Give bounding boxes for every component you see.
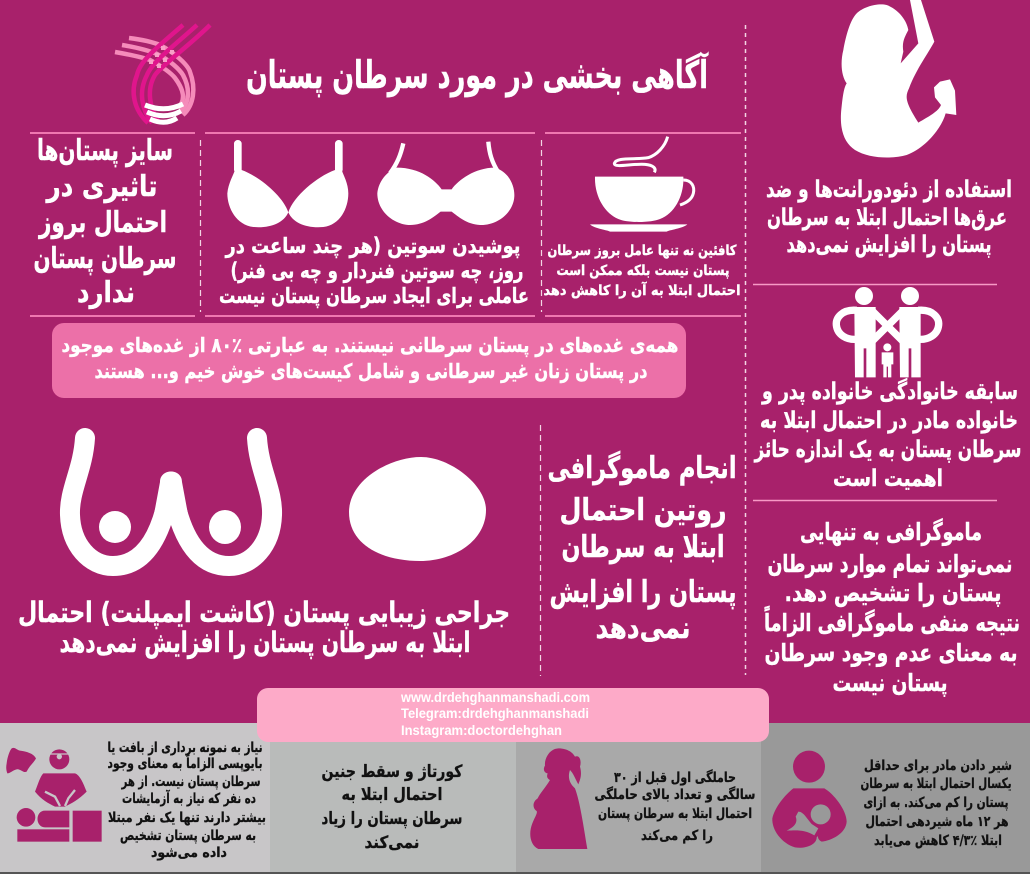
panel: implant surgery text: ابتلا به سرطان پستان را افزایش نمی‌دهد bbox=[60, 626, 470, 659]
icon: underwire bra bbox=[227, 140, 348, 227]
panel: bra text: پوشیدن سوتین (هر چند ساعت در bbox=[225, 234, 520, 258]
panel: routine mammography text: ابتلا به سرطان bbox=[562, 530, 724, 565]
icon: coffee cup bbox=[590, 137, 694, 232]
panel: routine mammography text bbox=[548, 450, 736, 646]
panel: breastfeeding text bbox=[860, 758, 1012, 849]
website and social box: www.drdehghanmanshadi.com bbox=[400, 690, 590, 705]
website and social box bbox=[257, 688, 769, 742]
panel: biopsy text: نیاز به نمونه برداری از بافت یا bbox=[108, 740, 262, 756]
panel: breastfeeding text: هر ۱۲ ماه شیردهی احتمال bbox=[866, 814, 1008, 830]
panel: curettage text: نمی‌کند bbox=[364, 833, 420, 853]
panel: biopsy text: به سرطان پستان تشخیص bbox=[120, 828, 256, 844]
website and social box: Telegram:drdehghanmanshadi bbox=[401, 706, 589, 721]
panel: bra text bbox=[219, 234, 529, 308]
panel: implant surgery text: جراحی زیبایی پستان (کاشت ایمپلنت) احتمال bbox=[18, 596, 510, 629]
callout: lumps box: در پستان زنان غیر سرطانی و شامل کیست‌های خوش خیم و... هستند bbox=[94, 359, 648, 384]
panel: caffeine text bbox=[544, 243, 740, 299]
panel: routine mammography text: انجام ماموگرافی bbox=[548, 450, 736, 486]
panel: breast size text bbox=[34, 133, 176, 309]
panel: implant surgery text bbox=[18, 596, 510, 659]
panel: curettage text: احتمال ابتلا به bbox=[342, 785, 442, 805]
panel: family history text bbox=[754, 378, 1022, 492]
panel: pregnancy text bbox=[594, 769, 756, 844]
panel: pregnancy text: را کم می‌کند bbox=[641, 828, 713, 844]
panel: mammography alone text bbox=[764, 518, 1020, 697]
panel: biopsy text bbox=[108, 740, 266, 861]
panel: breast size text: احتمال بروز bbox=[38, 205, 167, 239]
panel: mammography alone text: پستان نیست bbox=[832, 669, 948, 697]
callout: lumps box bbox=[52, 323, 686, 398]
panel: breast size text: سرطان پستان bbox=[34, 241, 176, 276]
panel: family history text: اهمیت است bbox=[833, 466, 943, 492]
panel: curettage text: سرطان پستان را زیاد bbox=[322, 809, 462, 829]
panel: bra text: عاملی برای ایجاد سرطان پستان نیست bbox=[219, 284, 529, 308]
panel: biopsy text: بیشتر دارند تنها یک نفر مبتلا bbox=[108, 810, 266, 826]
panel: pregnancy text: احتمال ابتلا به سرطان پستان bbox=[598, 806, 752, 822]
icon: breastfeeding mother bbox=[772, 751, 847, 848]
panel: breast size text: تاثیری در bbox=[45, 169, 157, 203]
panel: breastfeeding text: ابتلا ٪۴/۳ کاهش می‌یابد bbox=[874, 833, 1002, 849]
icon: implant bbox=[349, 457, 486, 561]
callout: lumps box: همه‌ی غده‌های در پستان سرطانی نیستند. به عبارتی ٪۸۰ از غده‌های موجود bbox=[61, 333, 678, 358]
panel: routine mammography text: پستان را افزایش bbox=[550, 575, 736, 610]
panel: routine mammography text: روتین احتمال bbox=[560, 493, 726, 528]
icon: wireless bra bbox=[377, 142, 514, 225]
panel: caffeine text: کافئین نه تنها عامل بروز سرطان bbox=[548, 243, 737, 259]
icon: pregnant woman bbox=[530, 748, 587, 849]
panel: breast size text: ندارد bbox=[77, 275, 135, 309]
panel: bra text: روز، چه سوتین فنردار و چه بی فنر) bbox=[230, 259, 524, 283]
icon: ribbon logo bbox=[115, 25, 210, 123]
panel: pregnancy text: سالگی و تعداد بالای حاملگی bbox=[594, 786, 756, 803]
panel: biopsy text: ده نفر که نیاز به آزمایشات bbox=[122, 789, 256, 807]
panel: pregnancy text: حاملگی اول قبل از ۳۰ bbox=[614, 769, 736, 786]
website and social box: Instagram:doctordehghan bbox=[401, 723, 562, 738]
icon: doctor and patient bbox=[6, 748, 102, 842]
panel: caffeine text: پستان نیست بلکه ممکن است bbox=[556, 263, 730, 279]
panel: biopsy text: سرطان پستان نیست. از هر bbox=[121, 774, 260, 790]
panel: caffeine text: احتمال ابتلا به آن را کاهش دهد bbox=[544, 281, 740, 299]
title: آگاهی بخشی در مورد سرطان پستان bbox=[246, 51, 709, 97]
panel: biopsy text: بایوپسی الزاماً به معنای وجود bbox=[108, 753, 262, 772]
panel: biopsy text: داده می‌شود bbox=[151, 845, 227, 861]
panel: curettage text: کورتاژ و سقط جنین bbox=[322, 762, 463, 782]
icon: woman raising arm bbox=[841, 0, 956, 158]
icon: family bbox=[836, 287, 939, 377]
panel: curettage text bbox=[322, 762, 463, 853]
panel: breast size text: سایز پستان‌ها bbox=[37, 133, 173, 168]
panel: routine mammography text: نمی‌دهد bbox=[596, 611, 690, 646]
icon: breast implant outline bbox=[70, 438, 272, 566]
panel: deodorant text bbox=[766, 177, 1012, 258]
bottom grey panels background bbox=[0, 723, 1030, 874]
